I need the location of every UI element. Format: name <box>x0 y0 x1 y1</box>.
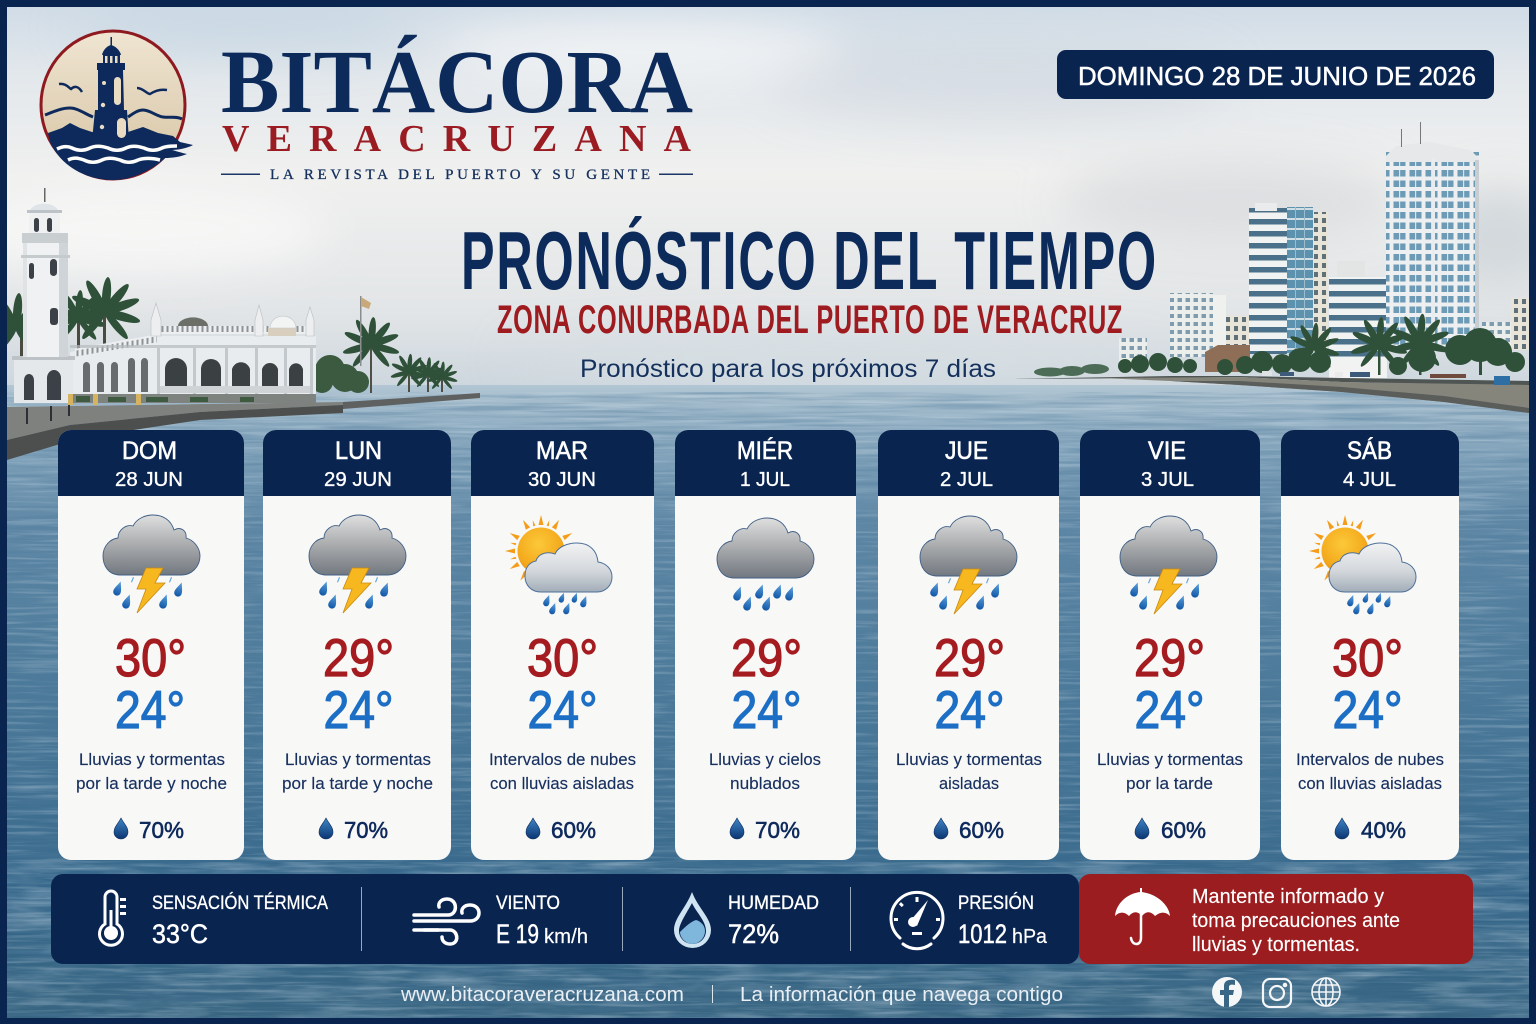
panel: Jueves forecast: 29° <box>934 629 1005 688</box>
panel: Viernes forecast: Lluvias y tormentas <box>1097 750 1243 769</box>
palms behind palace <box>0 277 141 400</box>
footer slogan: La información que navega contigo <box>740 984 1063 1006</box>
shore street and seawall <box>1010 376 1529 413</box>
palace <box>70 303 316 403</box>
logo birds <box>59 84 167 94</box>
logo lighthouse <box>92 37 129 141</box>
icon: storm <box>1120 516 1217 614</box>
stat: humedad: 72% <box>728 919 779 949</box>
panel: Martes forecast <box>471 430 654 860</box>
stat: viento: E 19 <box>496 919 539 949</box>
footer website: www.bitacoraveracruzana.com <box>400 984 684 1006</box>
forecast note: Pronóstico para los próximos 7 días <box>580 355 996 383</box>
stat: viento <box>414 893 588 949</box>
panel: Jueves forecast: 2 JUL <box>940 469 993 491</box>
panel: Miércoles forecast: 1 JUL <box>740 469 790 491</box>
panel: Miércoles forecast: 24° <box>732 681 802 740</box>
illustration: left waterfront with clock tower and palace <box>0 188 480 460</box>
panel: Domingo forecast: 30° <box>115 629 186 688</box>
icon: storm <box>309 515 406 613</box>
subtitle: ZONA CONURBADA DEL PUERTO DE VERACRUZ <box>497 298 1123 342</box>
panel: Sábado forecast: 4 JUL <box>1343 469 1396 491</box>
clock tower <box>12 188 75 403</box>
panel: Viernes forecast: 24° <box>1134 681 1204 740</box>
icon: facebook <box>1212 977 1242 1007</box>
icon: storm <box>920 516 1017 614</box>
logo lighthouse windows <box>100 56 126 138</box>
icon: precipitation drop <box>934 818 948 839</box>
far right buildings <box>1482 298 1529 350</box>
icon: precipitation drop <box>319 818 333 839</box>
icon: precipitation drop <box>1135 818 1149 839</box>
panel: Viernes forecast <box>1080 430 1260 860</box>
callout: advice <box>1079 874 1473 964</box>
panel: Lunes forecast: Lluvias y tormentas <box>285 750 431 769</box>
stat: presión <box>891 892 1048 949</box>
stat: sensación térmica: SENSACIÓN TÉRMICA <box>152 892 328 914</box>
panel: Martes forecast: 60% <box>551 817 596 843</box>
advice text: toma precauciones ante <box>1192 910 1400 932</box>
background: lower water texture <box>0 862 1536 1022</box>
background: clouds <box>0 8 1536 382</box>
stat: viento: km/h <box>544 926 588 948</box>
panel: Miércoles forecast: 70% <box>755 817 800 843</box>
panel: Jueves forecast: 24° <box>934 681 1004 740</box>
icon: instagram <box>1263 979 1291 1007</box>
panel: Jueves forecast <box>878 430 1059 860</box>
panel: Martes forecast: 30 JUN <box>528 469 596 491</box>
background: water dark ripples <box>0 392 1536 1024</box>
icon: umbrella <box>1115 888 1170 944</box>
panel: Domingo forecast <box>58 430 244 860</box>
icon: storm <box>103 515 200 613</box>
panel: Miércoles forecast: nublados <box>730 774 800 793</box>
panel: Viernes forecast: por la tarde <box>1126 774 1213 793</box>
icon: globe <box>1312 978 1340 1006</box>
background: water <box>0 385 1536 1024</box>
panel: Martes forecast: 24° <box>528 681 598 740</box>
panel: Lunes forecast <box>263 430 451 860</box>
far shore trees <box>1034 364 1109 376</box>
background: water light ripples <box>0 392 1536 1024</box>
brand tagline: LA REVISTA DEL PUERTO Y SU GENTE <box>270 167 650 183</box>
icon: precipitation drop <box>526 818 540 839</box>
panel: Martes forecast: 30° <box>527 629 598 688</box>
stat: humedad: HUMEDAD <box>728 893 819 914</box>
stat: presión: 1012 <box>958 919 1007 949</box>
panel: Viernes forecast: 29° <box>1134 629 1205 688</box>
panel: Martes forecast: MAR <box>536 437 588 465</box>
panel: Domingo forecast: por la tarde y noche <box>76 774 227 793</box>
icon: precipitation drop <box>730 818 744 839</box>
brand second line: VERACRUZANA <box>222 118 692 160</box>
panel: Lunes forecast: LUN <box>335 437 382 465</box>
panel: Domingo forecast: DOM <box>122 437 177 465</box>
panel: Jueves forecast: 60% <box>959 817 1004 843</box>
icon: sun, cloud and rain <box>505 515 612 615</box>
stat: sensación térmica: 33°C <box>152 919 208 949</box>
stat: humedad <box>674 892 819 949</box>
brand wordmark <box>221 33 693 183</box>
icon: sun, cloud and rain <box>1309 515 1416 615</box>
logo sea waves and hills <box>45 108 182 119</box>
stat: sensación térmica <box>100 891 328 949</box>
low striped tower <box>1329 261 1387 378</box>
panel: Martes forecast: Intervalos de nubes <box>489 750 636 769</box>
logo: lighthouse emblem <box>41 31 193 180</box>
stat: presión: PRESIÓN <box>958 892 1034 914</box>
far palm trees and greenery <box>311 296 458 393</box>
panel: Miércoles forecast: Lluvias y cielos <box>709 750 821 769</box>
small far building <box>1119 338 1147 362</box>
panel: Jueves forecast: aisladas <box>939 774 999 793</box>
panel: Sábado forecast: 40% <box>1361 817 1406 843</box>
illustration: right skyline with towers <box>1010 122 1529 413</box>
panel: Domingo forecast: 24° <box>115 681 185 740</box>
panel: Miércoles forecast: MIÉR <box>737 436 793 465</box>
promenade bollards and figures <box>26 394 141 424</box>
shore palms and trees <box>1118 313 1525 375</box>
advice text: Mantente informado y <box>1192 886 1384 908</box>
icon: rain cloud <box>717 518 814 612</box>
brown building <box>1205 345 1250 372</box>
advice text: lluvias y tormentas. <box>1192 934 1360 956</box>
mid-rise buildings <box>1170 293 1250 357</box>
logo white waves <box>57 146 177 162</box>
panel: Viernes forecast: 3 JUL <box>1141 469 1194 491</box>
date badge <box>1057 50 1494 99</box>
panel: Sábado forecast: 30° <box>1332 629 1403 688</box>
malecon quay <box>7 393 480 460</box>
panel: Sábado forecast: 24° <box>1332 681 1402 740</box>
panel: Jueves forecast: JUE <box>945 437 988 465</box>
stat: viento: VIENTO <box>496 893 560 914</box>
panel: Miércoles forecast <box>675 430 856 860</box>
panel: Martes forecast: con lluvias aisladas <box>490 774 634 793</box>
panel: Domingo forecast: 70% <box>139 817 184 843</box>
panel: Sábado forecast: SÁB <box>1347 436 1392 465</box>
brand name: BITÁCORA <box>221 33 693 132</box>
panel: Domingo forecast: 28 JUN <box>115 469 183 491</box>
panel: Lunes forecast: 29 JUN <box>324 469 392 491</box>
panel: Domingo forecast: Lluvias y tormentas <box>79 750 225 769</box>
panel: Viernes forecast: VIE <box>1148 437 1186 465</box>
panel: Miércoles forecast: 29° <box>731 629 802 688</box>
date badge: DOMINGO 28 DE JUNIO DE 2026 <box>1078 61 1476 91</box>
background: sky <box>0 0 1536 390</box>
icon: precipitation drop <box>114 818 128 839</box>
panel: Jueves forecast: Lluvias y tormentas <box>896 750 1042 769</box>
panel: Sábado forecast <box>1281 430 1459 860</box>
panel: Viernes forecast: 60% <box>1161 817 1206 843</box>
panel: Sábado forecast: Intervalos de nubes <box>1296 750 1444 769</box>
panel: current conditions bar <box>51 874 1079 964</box>
stat: presión: hPa <box>1012 926 1048 948</box>
panel: Sábado forecast: con lluvias aisladas <box>1298 774 1442 793</box>
panel: Lunes forecast: 29° <box>323 629 394 688</box>
twin tower <box>1249 203 1328 354</box>
panel: Lunes forecast: por la tarde y noche <box>282 774 433 793</box>
street vehicles <box>1262 371 1510 385</box>
panel: Lunes forecast: 70% <box>344 817 388 843</box>
icon: precipitation drop <box>1335 818 1349 839</box>
tall tower <box>1386 122 1479 351</box>
panel: Lunes forecast: 24° <box>324 681 394 740</box>
advice text <box>1192 886 1400 956</box>
